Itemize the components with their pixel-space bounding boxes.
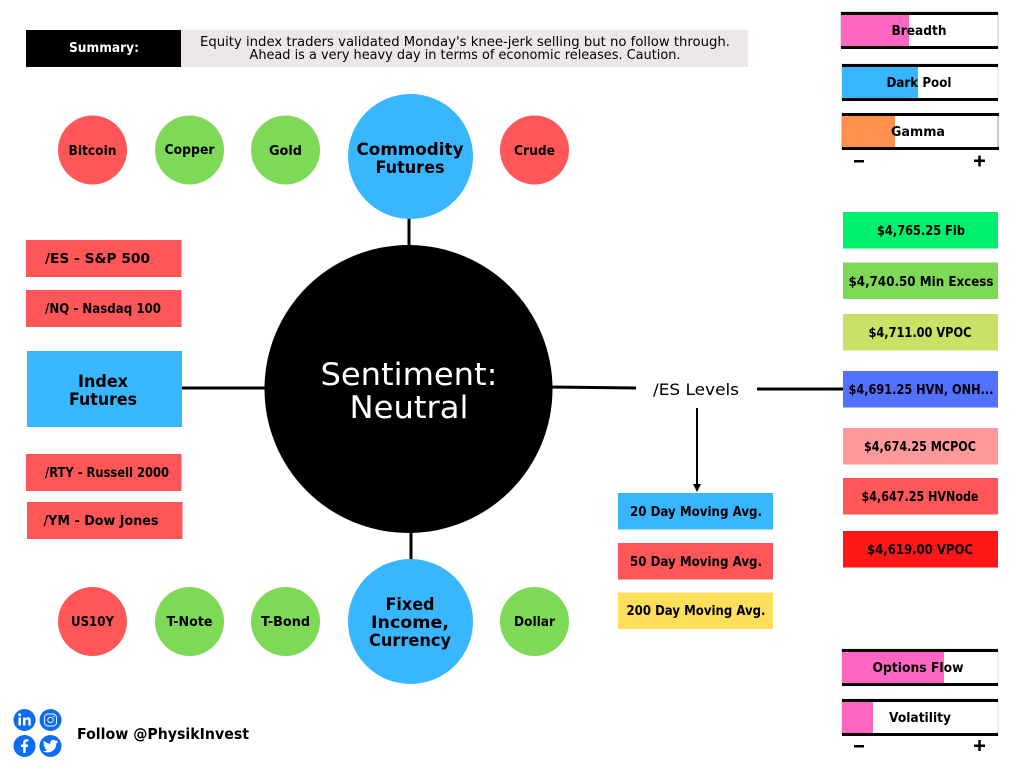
- fixed income hub: Income,: [371, 613, 449, 633]
- nq: [26, 290, 182, 327]
- commodity futures hub: Futures: [376, 158, 444, 178]
- t-bond: [251, 587, 320, 656]
- 4711: [843, 314, 998, 350]
- summary banner: [26, 30, 748, 67]
- gold: [251, 116, 320, 184]
- central circle: sentiment: Neutral: [350, 390, 468, 426]
- fixed income and currency row: [58, 587, 569, 656]
- 4619: [843, 531, 998, 568]
- index futures box: Index: [78, 372, 128, 392]
- fixed income hub: Fixed: [386, 595, 434, 615]
- crude: [500, 116, 569, 184]
- commodity markets row: [58, 116, 569, 184]
- copper: [155, 116, 224, 184]
- icon: twitter: [40, 735, 62, 757]
- bitcoin: Bitcoin: [68, 144, 116, 159]
- commodity futures hub: Commodity: [356, 140, 464, 160]
- gauge: options flow: Options Flow: [872, 661, 964, 676]
- 4740.50: [843, 262, 998, 299]
- gauge: dark pool: Dark Pool: [886, 76, 952, 91]
- icon: facebook: [14, 735, 36, 757]
- 4711: $4,711.00 VPOC: [868, 326, 972, 341]
- es levels label: /ES Levels: [653, 380, 739, 399]
- central circle: sentiment: Sentiment:: [320, 357, 498, 393]
- us10y: US10Y: [71, 615, 115, 630]
- t-note: [155, 587, 224, 656]
- gauge: volatility: [842, 699, 998, 736]
- 4674.25: $4,674.25 MCPOC: [864, 440, 976, 455]
- arrow to moving averages: [693, 408, 701, 492]
- 4647.25: [843, 478, 998, 514]
- gauge scale bottom: [854, 740, 985, 751]
- gauge: breadth: [841, 12, 998, 49]
- icon: instagram: [40, 709, 62, 731]
- 20 day: [618, 493, 773, 530]
- 20 day: 20 Day Moving Avg.: [630, 505, 762, 520]
- social icons: [14, 709, 62, 757]
- es: /ES - S&P 500: [45, 252, 150, 267]
- t-note: T-Note: [166, 615, 213, 630]
- 4674.25: [843, 428, 998, 464]
- 50 day: 50 Day Moving Avg.: [630, 555, 762, 570]
- 4691.25: $4,691.25 HVN, ONH...: [848, 383, 994, 398]
- commodity futures hub: [348, 94, 473, 219]
- index futures panel: [26, 240, 182, 539]
- 50 day: [618, 543, 773, 580]
- 200 day: [618, 592, 773, 629]
- 4691.25: [843, 371, 998, 408]
- index futures box: Futures: [69, 390, 137, 410]
- moving averages: [618, 493, 773, 629]
- fixed income hub: [348, 559, 473, 684]
- icon: linkedin: [14, 709, 36, 731]
- us10y: [58, 587, 127, 656]
- 4740.50: $4,740.50 Min Excess: [848, 275, 994, 290]
- dollar: [500, 587, 569, 656]
- fixed income hub: Currency: [369, 631, 451, 651]
- crude: Crude: [514, 144, 555, 159]
- es: [26, 240, 182, 277]
- connector lines: [182, 215, 843, 562]
- summary banner: Equity index traders validated Monday's knee-jerk selling but no follow through.: [200, 34, 730, 50]
- summary banner: Ahead is a very heavy day in terms of economic releases. Caution.: [250, 47, 680, 63]
- bitcoin: [58, 116, 127, 184]
- copper: Copper: [164, 143, 215, 158]
- 4647.25: $4,647.25 HVNode: [862, 490, 979, 505]
- gauge: volatility: Volatility: [889, 711, 951, 726]
- 4765.25: [843, 212, 998, 248]
- gauge: breadth: Breadth: [892, 24, 946, 39]
- nq: /NQ - Nasdaq 100: [45, 302, 161, 317]
- gauge: dark pool: [842, 64, 998, 101]
- gauge: gamma: [842, 113, 999, 150]
- gauge: options flow: [842, 649, 998, 686]
- gold: Gold: [269, 144, 302, 159]
- follow text: Follow @PhysikInvest: [77, 725, 249, 743]
- rty: [26, 454, 182, 491]
- 4619: $4,619.00 VPOC: [867, 543, 973, 558]
- dollar: Dollar: [514, 615, 556, 630]
- es price levels: [843, 212, 998, 568]
- gauge scale top: [854, 156, 985, 166]
- ym: /YM - Dow Jones: [44, 514, 159, 529]
- index futures box: [27, 351, 182, 427]
- t-bond: T-Bond: [261, 615, 310, 630]
- 4765.25: $4,765.25 Fib: [877, 224, 965, 239]
- rty: /RTY - Russell 2000: [45, 466, 169, 481]
- summary banner: Summary:: [69, 41, 139, 56]
- central circle: sentiment: [264, 245, 552, 533]
- ym: [27, 502, 182, 539]
- gauge: gamma: Gamma: [891, 125, 945, 140]
- 200 day: 200 Day Moving Avg.: [626, 604, 766, 619]
